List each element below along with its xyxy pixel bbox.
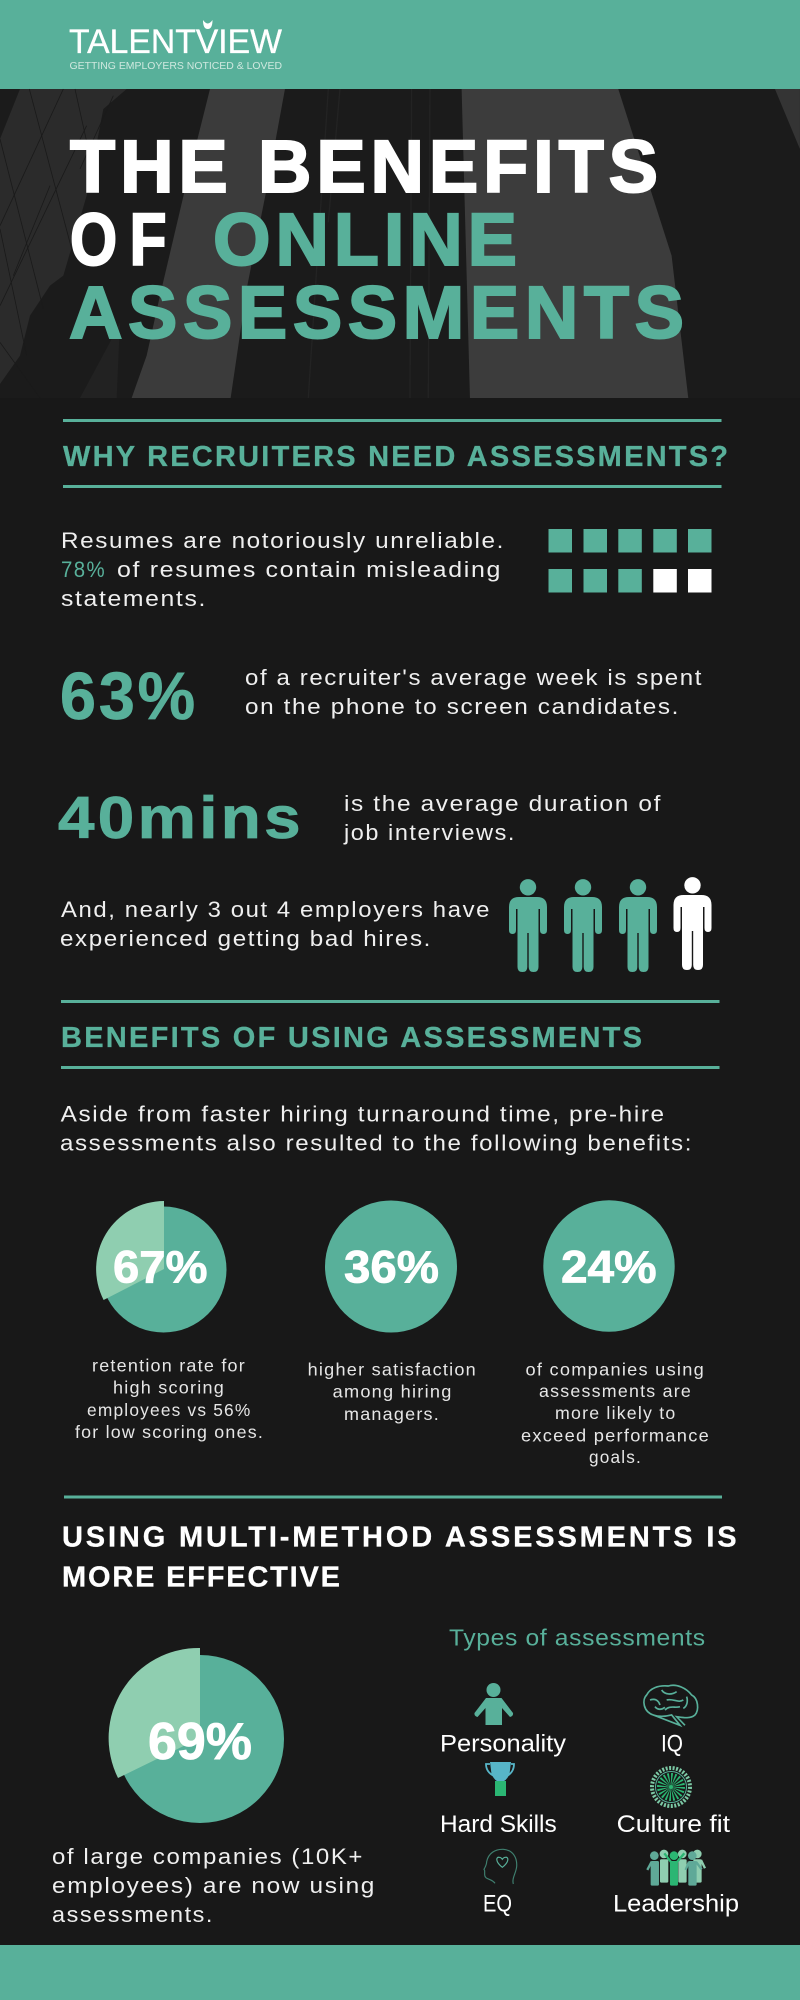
text: 24% caption: assessments are	[539, 1381, 692, 1401]
text: 67% caption: for low scoring ones.	[75, 1422, 264, 1442]
text: 69% caption	[52, 1844, 376, 1927]
heading: WHY RECRUITERS NEED ASSESSMENTS?	[63, 441, 728, 473]
text: 63% description: of a recruiter's average week is spent	[245, 665, 703, 690]
label: culture fit: Culture fit	[617, 1811, 730, 1838]
icon: people 3 of 4	[509, 877, 712, 972]
header band with logo	[0, 0, 800, 89]
chart: 36% circle: 36%	[344, 1242, 439, 1293]
text: resumes: statements.	[61, 586, 207, 611]
text: 69% caption: assessments.	[52, 1902, 214, 1927]
icon: leadership group	[647, 1850, 705, 1886]
heading	[62, 1522, 737, 1594]
text: 63% description: on the phone to screen candidates.	[245, 694, 680, 719]
label: hard skills: Hard Skills	[440, 1811, 557, 1838]
chart: 69% pie	[109, 1648, 284, 1823]
title	[69, 125, 684, 354]
icon: trophy	[486, 1762, 514, 1796]
text: 40mins description	[343, 791, 662, 845]
text: 36% caption: managers.	[344, 1404, 440, 1424]
text: 67% caption: high scoring	[113, 1378, 225, 1398]
text: 24% caption: more likely to	[555, 1403, 676, 1423]
chart: 69% pie: 69%	[148, 1713, 252, 1771]
chart: 67% pie: 67%	[113, 1242, 208, 1293]
text: 40mins description: is the average duration of	[344, 791, 662, 816]
text: 67% caption	[75, 1356, 264, 1442]
icon: square grid 8 of 10	[548, 529, 712, 592]
stat: 63%: 63%	[60, 659, 198, 734]
icon: culture fit mandala	[652, 1768, 690, 1806]
text: 36% caption: among hiring	[333, 1382, 453, 1402]
text: 24% caption	[521, 1360, 710, 1467]
title: ONLINE	[213, 198, 517, 281]
heading: BENEFITS OF USING ASSESSMENTS	[61, 1022, 642, 1054]
icon: EQ head with heart	[484, 1849, 517, 1884]
text: 24% caption: exceed performance	[521, 1426, 710, 1446]
text: 36% caption	[308, 1360, 477, 1424]
heading: MORE EFFECTIVE	[62, 1562, 340, 1594]
text: intro	[60, 1102, 693, 1156]
chart: 24% circle: 24%	[561, 1242, 657, 1293]
text: 67% caption: retention rate for	[92, 1356, 246, 1376]
text: intro: assessments also resulted to the following benefits:	[60, 1131, 693, 1156]
text: bad hires	[60, 897, 491, 951]
text: 40mins description: job interviews.	[343, 820, 516, 845]
subheading: types of assessments: Types of assessments	[449, 1625, 706, 1651]
title: THE BENEFITS	[70, 125, 658, 208]
text: 24% caption: of companies using	[526, 1360, 705, 1380]
heading: USING MULTI-METHOD ASSESSMENTS IS	[62, 1522, 737, 1554]
footer band	[0, 1945, 800, 2000]
text: bad hires: And, nearly 3 out 4 employers have	[61, 897, 491, 922]
section: benefits of using assessments	[60, 1000, 720, 1467]
text: 69% caption: of large companies (10K+	[52, 1844, 364, 1869]
text: resumes: 78%	[61, 557, 106, 582]
text: 63% description	[245, 665, 703, 719]
icon: personality	[474, 1683, 513, 1725]
title: ASSESSMENTS	[69, 271, 684, 354]
chart: 24% circle	[543, 1200, 675, 1332]
text: 36% caption: higher satisfaction	[308, 1360, 477, 1380]
label: personality: Personality	[440, 1731, 566, 1758]
label: IQ: IQ	[661, 1731, 683, 1758]
label: EQ: EQ	[483, 1891, 512, 1918]
logo: TalentView: TALENTVIEW	[69, 23, 282, 61]
hero panel with building photo and title	[0, 89, 800, 398]
icon: brain	[644, 1685, 698, 1725]
chart: 67% pie	[96, 1201, 226, 1332]
logo: TalentView: GETTING EMPLOYERS NOTICED & LOVED	[70, 61, 282, 72]
text: 24% caption: goals.	[589, 1447, 642, 1467]
text: intro: Aside from faster hiring turnaround time, pre-hire	[61, 1102, 666, 1127]
title: OF	[70, 199, 179, 281]
text: resumes	[61, 528, 505, 611]
text: 69% caption: employees) are now using	[52, 1873, 376, 1898]
text: resumes: of resumes contain misleading	[117, 557, 502, 582]
section: multi-method assessments	[52, 1496, 739, 1927]
text: bad hires: experienced getting bad hires.	[60, 926, 432, 951]
chart: 36% circle	[325, 1200, 457, 1332]
text: resumes: Resumes are notoriously unreliable.	[61, 528, 505, 553]
section: why recruiters need assessments	[58, 419, 728, 972]
text: 67% caption: employees vs 56%	[87, 1400, 252, 1420]
label: leadership: Leadership	[613, 1891, 739, 1918]
stat: 40mins: 40mins	[58, 785, 304, 851]
